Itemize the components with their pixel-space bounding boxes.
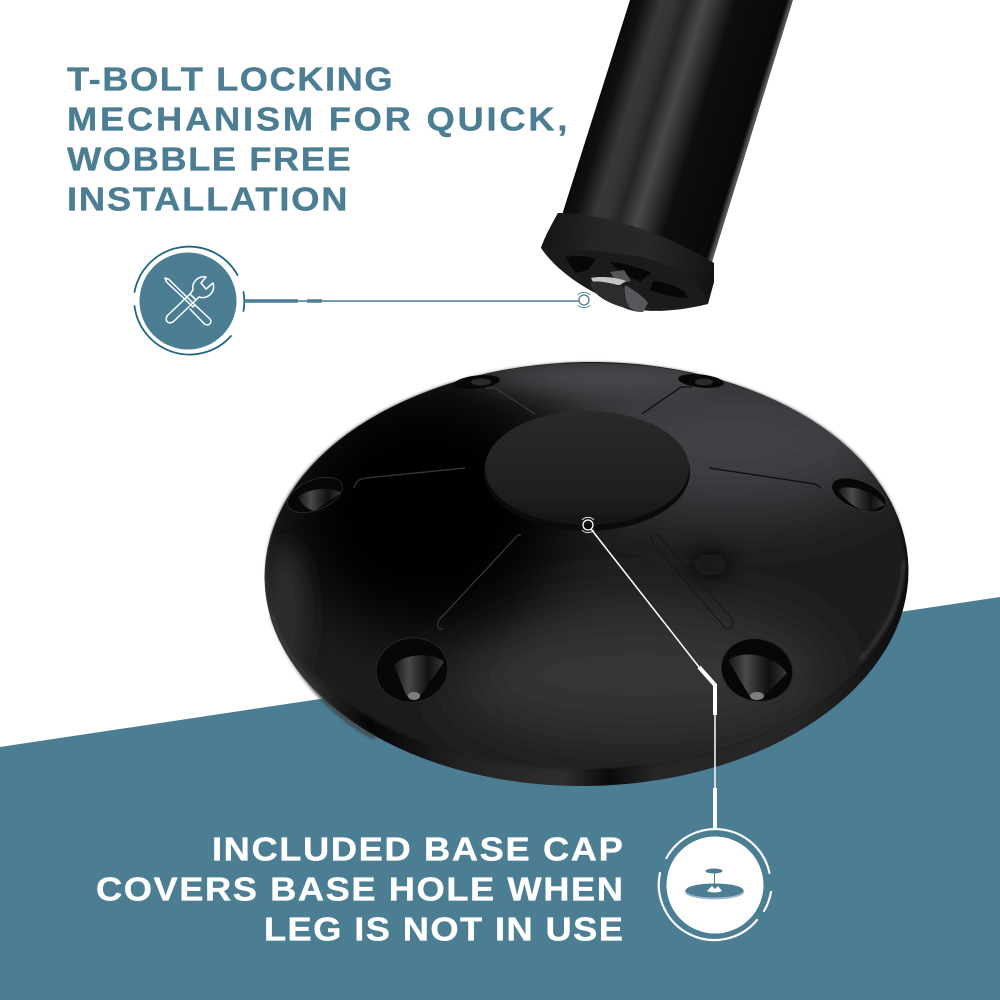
- hole: back right: [677, 372, 725, 390]
- hole: rear left: [282, 470, 348, 520]
- mounting holes: [282, 372, 891, 709]
- top face: [264, 357, 908, 775]
- hole: front left: [371, 632, 453, 708]
- face shading: [265, 360, 900, 745]
- t-bolt: [590, 270, 648, 312]
- leg tube: [562, 0, 793, 262]
- heading: base cap: INCLUDED BASE CAP: [212, 832, 623, 868]
- rim: [261, 356, 912, 792]
- face openings: [565, 256, 688, 298]
- heading: t-bolt locking: MECHANISM FOR QUICK,: [67, 102, 567, 138]
- rim highlights: [272, 560, 904, 738]
- heading: base cap: [96, 832, 623, 948]
- hole: front right: [714, 631, 800, 709]
- icon: wrench and screwdriver: [134, 247, 244, 355]
- heading: t-bolt locking: T-BOLT LOCKING: [67, 62, 393, 98]
- hole: rear right: [827, 471, 891, 519]
- heading: t-bolt locking: WOBBLE FREE: [67, 142, 351, 178]
- slots: [354, 387, 821, 629]
- collar silhouette: [541, 213, 714, 311]
- heading: t-bolt locking: [67, 62, 567, 218]
- base cap: [484, 411, 690, 531]
- table leg with t-bolt: [541, 0, 793, 312]
- collar band: [541, 213, 714, 301]
- heading: t-bolt locking: INSTALLATION: [67, 182, 347, 218]
- callout line: base cap: [582, 517, 715, 830]
- heading: base cap: LEG IS NOT IN USE: [264, 912, 623, 948]
- hole: back left: [453, 373, 501, 391]
- heading: base cap: COVERS BASE HOLE WHEN: [96, 872, 623, 908]
- background teal band: [0, 597, 1000, 1000]
- icon: base with cap: [659, 829, 771, 940]
- round base plate: [261, 356, 912, 792]
- callout line: t-bolt: [244, 292, 590, 308]
